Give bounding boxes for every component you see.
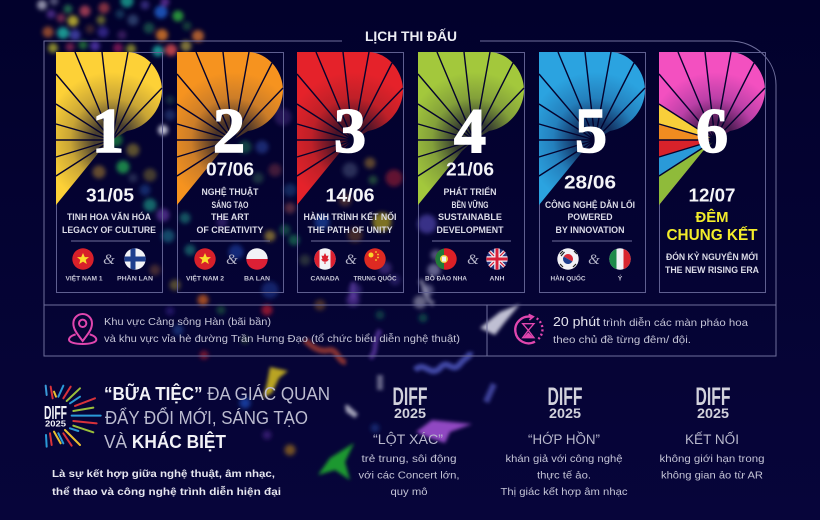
column: Lột xác: quy mô bbox=[390, 486, 428, 498]
panel: match 4: & bbox=[467, 252, 479, 268]
column: Lột xác: với các Concert lớn, bbox=[358, 470, 460, 482]
column: Hớp hồn: “HỚP HỒN” bbox=[528, 432, 600, 447]
venue text bbox=[104, 316, 460, 345]
panel: match 2: 2 bbox=[213, 95, 245, 166]
panel: match 2 bbox=[177, 52, 284, 292]
panel: match 1: PHẦN LAN bbox=[117, 272, 153, 282]
venue text: và khu vực vỉa hè đường Trần Hưng Đạo (tổ chức biểu diễn nghệ thuật) bbox=[104, 332, 460, 345]
column: Hớp hồn: Thị giác kết hợp âm nhạc bbox=[500, 486, 628, 498]
description text: Là sự kết hợp giữa nghệ thuật, âm nhạc, bbox=[52, 468, 275, 480]
column: Lột xác: “LỘT XÁC” bbox=[373, 432, 443, 447]
duration text bbox=[553, 314, 748, 346]
column: Hớp hồn: khán giả với công nghệ bbox=[506, 453, 623, 465]
logo: DIFF 2025 firework burst: 2025 bbox=[45, 418, 66, 428]
panel: match 2: NGHỆ THUẬT bbox=[202, 186, 259, 197]
column: Hớp hồn: DIFF bbox=[548, 383, 582, 411]
panel: match 3: TRUNG QUỐC bbox=[354, 272, 397, 282]
column: Kết nối: không gian ảo từ AR bbox=[661, 470, 763, 482]
heading: multi-sensory feast: “BỮA TIỆC” ĐA GIÁC QUAN bbox=[104, 383, 330, 404]
panel: match 1 bbox=[56, 52, 162, 292]
panel: match 4: SUSTAINABLE bbox=[438, 212, 502, 222]
logo: DIFF 2025 firework burst: DIFF bbox=[44, 403, 67, 423]
column: Kết nối: 2025 bbox=[697, 405, 729, 421]
panel: match 4: ANH bbox=[490, 276, 505, 282]
column: Kết nối: không giới hạn trong bbox=[660, 453, 765, 465]
description text bbox=[52, 468, 281, 498]
panel: match 5: HÀN QUỐC bbox=[550, 272, 586, 282]
panel: match 2: SÁNG TẠO bbox=[212, 200, 249, 210]
panel: match 1: TINH HOA VĂN HÓA bbox=[67, 211, 152, 222]
duration text: theo chủ đề từng đêm/ đội. bbox=[553, 334, 691, 346]
panel: match 1: LEGACY OF CULTURE bbox=[62, 225, 156, 235]
icon: location pin bbox=[69, 314, 96, 344]
column: Hớp hồn: 2025 bbox=[549, 405, 581, 421]
panel: match 3 bbox=[297, 52, 404, 292]
duration text: 20 phút bbox=[553, 314, 600, 329]
panel: match 4: BỀN VỮNG bbox=[452, 200, 489, 210]
panel: match 4 bbox=[418, 52, 524, 292]
panel: match 3: 3 bbox=[334, 95, 366, 166]
panel: match 5: POWERED bbox=[568, 212, 612, 222]
panel: match 4: DEVELOPMENT bbox=[436, 225, 504, 235]
panel: match 5: BY INNOVATION bbox=[556, 225, 624, 235]
panel: match 4: 4 bbox=[454, 95, 486, 166]
panel: final night bbox=[659, 52, 766, 292]
panel: match 1: & bbox=[103, 252, 115, 268]
firework particles bbox=[37, 0, 442, 456]
panel: match 1: 1 bbox=[92, 95, 124, 166]
panel: match 3: CANADA bbox=[310, 276, 340, 282]
panel: match 4: 21/06 bbox=[446, 158, 494, 180]
panel: final night: 12/07 bbox=[688, 184, 736, 206]
heading: multi-sensory feast: VÀ KHÁC BIỆT bbox=[104, 431, 227, 452]
panel: match 5: 5 bbox=[575, 95, 607, 166]
column: Kết nối bbox=[660, 383, 765, 482]
panel: match 2: BA LAN bbox=[244, 276, 270, 282]
panel: match 1: 31/05 bbox=[86, 184, 134, 206]
description text: thể thao và công nghệ trình diễn hiện đại bbox=[52, 485, 281, 498]
heading: multi-sensory feast bbox=[104, 383, 330, 452]
panel: match 2: & bbox=[226, 252, 238, 268]
venue text: Khu vực Cảng sông Hàn (bãi bần) bbox=[104, 316, 271, 328]
panel: match 3: HÀNH TRÌNH KẾT NỐI bbox=[304, 211, 396, 222]
heading: multi-sensory feast: ĐẨY ĐỔI MỚI, SÁNG TẠO bbox=[105, 407, 308, 428]
panel: match 1: VIỆT NAM 1 bbox=[66, 274, 103, 282]
panel: match 2: OF CREATIVITY bbox=[196, 225, 264, 235]
logo: DIFF 2025 firework burst bbox=[44, 386, 101, 447]
panel: match 3: & bbox=[345, 252, 357, 268]
panel: match 5: Ý bbox=[618, 274, 623, 282]
panel: final night: ĐÊM bbox=[696, 208, 728, 226]
panel: final night: THE NEW RISING ERA bbox=[665, 265, 760, 275]
title: LỊCH THI ĐẤU bbox=[365, 28, 457, 44]
panel: match 5: 28/06 bbox=[564, 172, 616, 192]
panel: match 2: THE ART bbox=[211, 212, 250, 222]
panel: final night: 6 bbox=[696, 95, 728, 166]
firework sparks and squiggles bbox=[263, 280, 520, 480]
outer frame bbox=[44, 41, 776, 356]
column: Kết nối: DIFF bbox=[696, 383, 730, 411]
column: Lột xác: 2025 bbox=[394, 405, 426, 421]
panel: match 4: BỒ ĐÀO NHA bbox=[425, 272, 467, 282]
duration text: trình diễn các màn pháo hoa bbox=[603, 316, 748, 329]
column: Hớp hồn bbox=[500, 383, 628, 498]
panel: match 3: THE PATH OF UNITY bbox=[308, 225, 393, 235]
panel: match 2: 07/06 bbox=[206, 158, 254, 180]
panel: match 5: & bbox=[588, 252, 600, 268]
icon: hourglass timer bbox=[515, 314, 542, 343]
panel: match 5 bbox=[539, 52, 646, 292]
column: Hớp hồn: thực tế ảo. bbox=[537, 470, 591, 482]
panel: match 2: VIỆT NAM 2 bbox=[186, 274, 224, 282]
column: Lột xác bbox=[358, 383, 460, 498]
panel: match 3: 14/06 bbox=[326, 184, 374, 206]
column: Lột xác: trẻ trung, sôi động bbox=[362, 453, 457, 465]
panel: match 5: CÔNG NGHỆ DẪN LỐI bbox=[545, 199, 635, 210]
panel: match 4: PHÁT TRIỂN bbox=[444, 186, 496, 197]
panel: final night: ĐÓN KỶ NGUYÊN MỚI bbox=[666, 251, 758, 262]
column: Lột xác: DIFF bbox=[392, 383, 428, 411]
column: Kết nối: KẾT NỐI bbox=[685, 432, 739, 447]
panel: final night: CHUNG KẾT bbox=[666, 225, 758, 244]
